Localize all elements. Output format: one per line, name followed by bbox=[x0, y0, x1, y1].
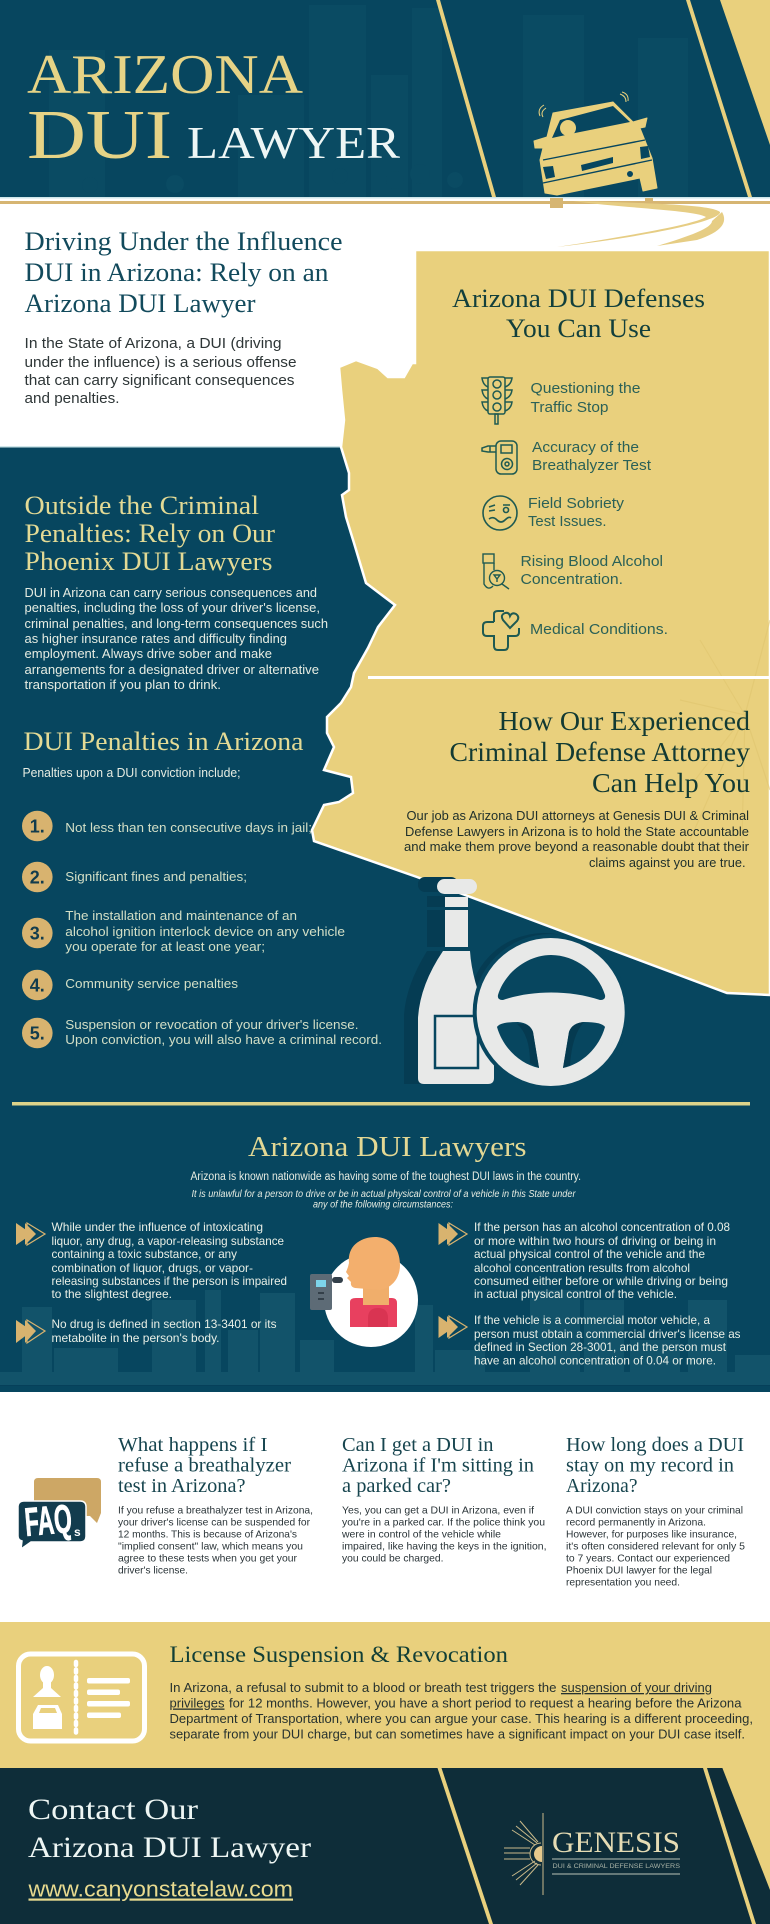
text: commercial vehicle: If the vehicle is a commercial motor vehicle, a bbox=[474, 1313, 710, 1327]
FAQ column 1: refuse a breathalyzer bbox=[118, 1454, 291, 1476]
title: DUI bbox=[27, 97, 172, 174]
text: how we help paragraph: Our job as Arizona DUI attorneys at Genesis DUI & Criminal bbox=[406, 808, 749, 823]
heading: outside the criminal penalties: Phoenix DUI Lawyers bbox=[24, 547, 272, 576]
icon: swerving car bbox=[534, 92, 657, 195]
text: license paragraph bbox=[170, 1680, 753, 1742]
icon: FAQs speech bubbles: FAQ bbox=[23, 1497, 74, 1545]
text: intro paragraph bbox=[24, 336, 296, 407]
text: website link: www.canyonstatelaw.com bbox=[27, 1876, 293, 1902]
panel: navy background bbox=[0, 446, 770, 1392]
icon: FAQs speech bubbles bbox=[18, 1478, 101, 1549]
text: alcohol concentration: alcohol concentration results from alcohol bbox=[474, 1261, 690, 1275]
icon: traffic light bbox=[482, 377, 512, 424]
item 5 bbox=[22, 1017, 382, 1048]
item 4: Community service penalties bbox=[65, 976, 239, 991]
item 4: 4. bbox=[30, 976, 45, 996]
item 5: Suspension or revocation of your driver's license. bbox=[65, 1017, 359, 1032]
text: under the influence: releasing substances if the person is impaired bbox=[52, 1274, 287, 1288]
text: accuracy of the breathalyzer test: Accuracy of the bbox=[532, 440, 639, 456]
item 2: 2. bbox=[30, 868, 45, 888]
skyline background bbox=[0, 1290, 770, 1386]
text: questioning the traffic stop bbox=[530, 381, 640, 416]
icon: person using breathalyzer bbox=[310, 1237, 418, 1347]
icon: bottle and steering wheel bbox=[404, 877, 629, 1090]
FAQ column 2: impaired, like having the keys in the ignition, bbox=[342, 1540, 546, 1552]
text: penalties intro: Penalties upon a DUI conviction include; bbox=[22, 766, 240, 780]
icon: arrow left 2 bbox=[16, 1320, 45, 1343]
text: intro paragraph: under the influence) is a serious offense bbox=[24, 355, 296, 371]
FAQ column 1: your driver's license can be suspended for bbox=[118, 1516, 310, 1528]
text: unlawful italic note bbox=[192, 1189, 576, 1210]
text: commercial vehicle: have an alcohol concentration of 0.04 or more. bbox=[474, 1354, 716, 1368]
divider bbox=[12, 1102, 750, 1106]
text: license paragraph: In Arizona, a refusal to submit to a blood or breath test triggers the bbox=[170, 1680, 556, 1695]
heading: how our experienced attorney can help bbox=[450, 706, 751, 798]
text: consequences paragraph bbox=[24, 585, 328, 692]
icon: driver's license card bbox=[18, 1654, 144, 1741]
FAQ column 2 bbox=[341, 1434, 546, 1564]
icon: blood test tube bbox=[483, 554, 509, 589]
panel: footer bbox=[0, 1767, 770, 1924]
heading: outside the criminal penalties: Penalties: Rely on Our bbox=[24, 519, 275, 548]
panel: license suspension bbox=[0, 1622, 770, 1768]
text: alcohol concentration: If the person has an alcohol concentration of 0.08 bbox=[474, 1220, 730, 1234]
heading: DUI defenses: Arizona DUI Defenses bbox=[452, 284, 705, 313]
text: consequences paragraph: DUI in Arizona can carry serious consequences and bbox=[24, 585, 317, 600]
item 1: 1. bbox=[30, 816, 45, 836]
text: how we help paragraph bbox=[404, 808, 750, 870]
text: alcohol concentration: consumed either before or while driving or being bbox=[474, 1274, 728, 1288]
FAQ column 1: test in Arizona? bbox=[118, 1475, 246, 1497]
item 3 bbox=[22, 908, 345, 954]
FAQ column 3: Phoenix DUI lawyer for the legal bbox=[566, 1564, 712, 1576]
item 3: alcohol ignition interlock device on any vehicle bbox=[65, 924, 345, 939]
item 5: Upon conviction, you will also have a criminal record. bbox=[65, 1032, 382, 1047]
item 3: The installation and maintenance of an bbox=[65, 908, 297, 923]
panel: Arizona state map bbox=[312, 250, 770, 995]
text: rising blood alcohol concentration: Concentration. bbox=[520, 572, 623, 588]
text: intro paragraph: In the State of Arizona, a DUI (driving bbox=[24, 336, 282, 352]
text: medical conditions: Medical Conditions. bbox=[530, 622, 668, 638]
text: alcohol concentration: in actual physical control of the vehicle. bbox=[474, 1287, 677, 1301]
item 3: you operate for at least one year; bbox=[65, 939, 265, 954]
FAQ column 3: Arizona? bbox=[566, 1475, 638, 1497]
icon: arrow right 2 bbox=[438, 1316, 467, 1338]
FAQ column 3: A DUI conviction stays on your criminal bbox=[566, 1504, 743, 1516]
text: field sobriety test issues: Test Issues. bbox=[528, 514, 606, 530]
heading: contact: Contact Our bbox=[28, 1793, 198, 1826]
heading: contact: Arizona DUI Lawyer bbox=[28, 1831, 311, 1864]
list: defenses bbox=[482, 377, 668, 650]
FAQ column 2: you're in a parked car. If the police think you bbox=[342, 1516, 545, 1528]
text: license paragraph: Department of Transportation, where you can argue your case. This hearing is a different proceeding, bbox=[170, 1711, 753, 1726]
FAQ column 3 bbox=[566, 1434, 745, 1588]
FAQ column 1: If you refuse a breathalyzer test in Arizona, bbox=[118, 1504, 313, 1516]
icon: woozy face bbox=[483, 496, 517, 530]
title bbox=[27, 44, 400, 174]
text: consequences paragraph: as higher insurance rates and difficulty finding bbox=[24, 631, 287, 646]
text: how we help paragraph: claims against you are true. bbox=[589, 855, 746, 870]
text: alcohol concentration: actual physical control of the vehicle and the bbox=[474, 1247, 705, 1261]
icon: FAQs speech bubbles: s bbox=[74, 1525, 81, 1539]
title: ARIZONA bbox=[27, 44, 304, 106]
text: license paragraph: suspension of your driving bbox=[561, 1680, 712, 1695]
text: unlawful italic note: It is unlawful for a person to drive or be in actual physical control of a vehicle in this State under bbox=[192, 1189, 576, 1200]
heading: outside the criminal penalties: Outside the Criminal bbox=[24, 491, 259, 520]
item 2: Significant fines and penalties; bbox=[65, 869, 247, 884]
text: questioning the traffic stop: Traffic Stop bbox=[530, 400, 608, 416]
text: intro paragraph: and penalties. bbox=[24, 391, 120, 407]
FAQ column 1: 12 months. This is because of Arizona's bbox=[118, 1528, 297, 1540]
logo: Genesis: DUI & CRIMINAL DEFENSE LAWYERS bbox=[552, 1863, 681, 1870]
FAQ column 2: you could be charged. bbox=[342, 1552, 444, 1564]
divider bbox=[368, 676, 770, 679]
text: alcohol concentration bbox=[474, 1220, 730, 1301]
FAQ column 2: Arizona if I'm sitting in bbox=[342, 1454, 534, 1476]
text: under the influence: combination of liquor, drugs, or vapor- bbox=[52, 1261, 253, 1275]
decoration: faint sun rays bbox=[680, 620, 770, 840]
heading: DUI defenses: You Can Use bbox=[506, 314, 651, 343]
text: under the influence: to the slightest degree. bbox=[52, 1287, 172, 1301]
text: toughest DUI laws: Arizona is known nationwide as having some of the toughest DUI laws in the country. bbox=[190, 1171, 581, 1183]
panel: header bbox=[0, 0, 770, 204]
text: consequences paragraph: transportation if you plan to drink. bbox=[24, 677, 221, 692]
text: under the influence: While under the influence of intoxicating bbox=[52, 1220, 263, 1234]
FAQ column 3: record permanently in Arizona. bbox=[566, 1516, 706, 1528]
FAQ column 2: Can I get a DUI in bbox=[342, 1434, 494, 1456]
icon: medical cross and heart bbox=[483, 611, 519, 650]
FAQ column 3: However, for purposes like insurance, bbox=[566, 1528, 737, 1540]
heading: contact bbox=[28, 1793, 311, 1864]
heading: driving under the influence bbox=[24, 227, 342, 318]
icon: arrow right 1 bbox=[438, 1223, 467, 1245]
text: under the influence: liquor, any drug, a vapor-releasing substance bbox=[52, 1234, 284, 1248]
FAQ column 3: stay on my record in bbox=[566, 1454, 734, 1476]
logo: Genesis bbox=[504, 1813, 681, 1895]
text: consequences paragraph: criminal penalties, and long-term consequences such bbox=[24, 616, 328, 631]
text: rising blood alcohol concentration: Rising Blood Alcohol bbox=[520, 554, 663, 570]
text: license paragraph: privileges bbox=[170, 1696, 225, 1710]
heading: outside the criminal penalties bbox=[24, 491, 275, 576]
text: commercial vehicle: person must obtain a commercial driver's license as bbox=[474, 1327, 740, 1341]
FAQ column 1: driver's license. bbox=[118, 1564, 188, 1576]
heading: license suspension and revocation: License Suspension & Revocation bbox=[170, 1642, 509, 1667]
item 1: Not less than ten consecutive days in jail; bbox=[65, 820, 312, 835]
FAQ column 2: a parked car? bbox=[342, 1475, 451, 1497]
item 4 bbox=[22, 970, 239, 1000]
FAQ column 2: were in control of the vehicle while bbox=[341, 1528, 501, 1540]
FAQ column 3: How long does a DUI bbox=[566, 1434, 744, 1456]
heading: how our experienced attorney can help: Criminal Defense Attorney bbox=[450, 737, 751, 767]
list: penalties bbox=[22, 811, 382, 1048]
FAQ column 2: Yes, you can get a DUI in Arizona, even if bbox=[342, 1504, 534, 1516]
text: rising blood alcohol concentration bbox=[520, 554, 663, 588]
FAQ column 3: representation you need. bbox=[566, 1576, 680, 1588]
FAQ column 1: "implied consent" law, which means you bbox=[118, 1540, 303, 1552]
text: accuracy of the breathalyzer test: Breathalyzer Test bbox=[532, 458, 651, 474]
text: license paragraph: separate from your DUI charge, but can sometimes have a significant impact on your DUI case itself. bbox=[170, 1726, 745, 1742]
heading: DUI penalties: DUI Penalties in Arizona bbox=[24, 727, 304, 756]
text: how we help paragraph: Defense Lawyers in Arizona is to hold the State accountable bbox=[405, 824, 749, 839]
text: unlawful italic note: any of the following circumstances: bbox=[313, 1200, 453, 1210]
icon: arrow left 1 bbox=[16, 1223, 45, 1245]
text: no drug: metabolite in the person's body. bbox=[52, 1331, 220, 1345]
item 1 bbox=[22, 811, 312, 841]
heading: driving under the influence: Arizona DUI Lawyer bbox=[24, 289, 256, 318]
text: intro paragraph: that can carry significant consequences bbox=[24, 373, 294, 389]
logo: Genesis: GENESIS bbox=[552, 1826, 680, 1859]
text: consequences paragraph: employment. Always drive sober and make bbox=[24, 646, 272, 661]
FAQ column 1: What happens if I bbox=[118, 1434, 268, 1456]
text: commercial vehicle: defined in Section 28-3001, and the person must bbox=[474, 1340, 727, 1354]
heading: how our experienced attorney can help: Can Help You bbox=[592, 768, 751, 798]
text: questioning the traffic stop: Questioning the bbox=[530, 381, 640, 397]
item 3: 3. bbox=[30, 924, 45, 944]
FAQ column 3: it's often considered relevant for only 5 bbox=[566, 1540, 745, 1552]
panel: FAQs bbox=[18, 1434, 745, 1588]
text: under the influence bbox=[52, 1220, 287, 1301]
text: no drug: No drug is defined in section 13-3401 or its bbox=[52, 1317, 276, 1331]
heading: driving under the influence: Driving Under the Influence bbox=[24, 227, 342, 256]
text: field sobriety test issues bbox=[528, 496, 625, 530]
text: field sobriety test issues: Field Sobriety bbox=[528, 496, 625, 512]
text: how we help paragraph: and make them prove beyond a reasonable doubt that their bbox=[404, 839, 750, 854]
title: LAWYER bbox=[187, 117, 400, 168]
text: no drug bbox=[52, 1317, 276, 1345]
heading: driving under the influence: DUI in Arizona: Rely on an bbox=[24, 258, 328, 287]
FAQ column 1 bbox=[118, 1434, 313, 1576]
text: commercial vehicle bbox=[474, 1313, 740, 1368]
text: consequences paragraph: penalties, including the loss of your driver's license, bbox=[24, 600, 320, 615]
item 5: 5. bbox=[30, 1024, 45, 1044]
FAQ column 1: agree to these tests when you get your bbox=[118, 1552, 297, 1564]
text: consequences paragraph: arrangements for a designated driver or alternative bbox=[24, 662, 319, 677]
icon: breathalyzer bbox=[482, 441, 517, 474]
text: accuracy of the breathalyzer test bbox=[532, 440, 651, 474]
heading: Arizona DUI Lawyers: Arizona DUI Lawyers bbox=[248, 1131, 526, 1163]
heading: how our experienced attorney can help: How Our Experienced bbox=[498, 706, 751, 736]
text: alcohol concentration: or more within two hours of driving or being in bbox=[474, 1234, 716, 1248]
FAQ column 3: to 7 years. Contact our experienced bbox=[566, 1552, 730, 1564]
heading: DUI defenses bbox=[452, 284, 705, 343]
icon: road swerve bbox=[550, 198, 724, 247]
text: license paragraph: for 12 months. However, you have a short period to request a hearing before the Arizona bbox=[229, 1696, 742, 1710]
text: under the influence: containing a toxic substance, or any bbox=[52, 1247, 237, 1261]
item 2 bbox=[22, 862, 247, 892]
